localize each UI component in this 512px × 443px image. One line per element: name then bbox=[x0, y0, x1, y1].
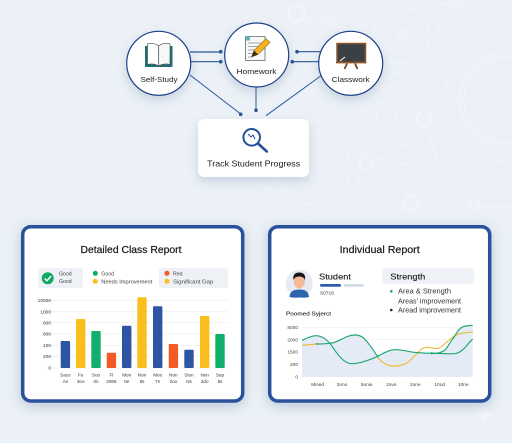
bar chart: 2do bbox=[201, 379, 209, 384]
bar chart: 2oo bbox=[170, 379, 178, 384]
legend: good badge: Good bbox=[59, 279, 72, 285]
line chart: 3ono bbox=[337, 382, 348, 388]
icon: paper and pencil bbox=[246, 36, 270, 60]
bar chart: Non bbox=[169, 373, 178, 378]
node: classwork bbox=[319, 31, 383, 95]
bar chart: Moo bbox=[153, 373, 163, 378]
line chart: 10od bbox=[434, 382, 445, 388]
decorative gears bbox=[263, 0, 512, 218]
bar chart: Non bbox=[138, 373, 147, 378]
strength box: Strength bbox=[390, 272, 426, 282]
line chart: 2ove bbox=[386, 382, 397, 388]
heading: track student progress: Track Student Progress bbox=[207, 159, 300, 169]
legend: red and significant gap: Significant Gap bbox=[173, 279, 213, 285]
line chart: 8000 bbox=[287, 325, 298, 331]
line chart: 200 bbox=[290, 362, 298, 368]
node: self-study bbox=[127, 31, 191, 95]
line chart: 0 bbox=[295, 375, 298, 381]
bar chart: 100 bbox=[43, 343, 51, 349]
bar chart: 800 bbox=[43, 320, 51, 326]
line chart: 1500 bbox=[287, 350, 298, 356]
bar chart: Fe bbox=[78, 373, 84, 378]
bar chart: 10000 bbox=[38, 298, 51, 304]
bar chart: Sion bbox=[184, 373, 194, 378]
strength list: Area & Strength bbox=[398, 289, 451, 296]
bar chart: Fl bbox=[109, 373, 113, 378]
panel: individual report bbox=[270, 227, 490, 401]
bar chart: 0 bbox=[48, 366, 51, 372]
icon: magnifier bbox=[243, 129, 267, 152]
bar chart: 8s bbox=[218, 379, 223, 384]
bar chart: 0n bbox=[93, 379, 99, 384]
strength box bbox=[382, 268, 474, 284]
legend: good and needs improvement bbox=[93, 271, 153, 285]
icon: chalkboard bbox=[336, 44, 366, 69]
legend: good badge bbox=[38, 268, 83, 288]
icon: open book bbox=[145, 43, 172, 67]
legend: good badge: Good bbox=[59, 272, 72, 278]
bar chart: 2066 bbox=[106, 379, 117, 384]
panel: track student progress bbox=[198, 119, 309, 177]
node: homework bbox=[225, 23, 289, 87]
line chart bbox=[287, 325, 473, 388]
legend: good and needs improvement: Needs Improvement bbox=[101, 279, 153, 285]
bar chart: 8s bbox=[140, 379, 145, 384]
label: self-study: Self-Study bbox=[140, 75, 178, 84]
bar chart: Mon bbox=[122, 373, 132, 378]
strength list: Areas' improvement bbox=[398, 298, 461, 305]
label: classwork: Classwork bbox=[332, 75, 370, 84]
chart subtitle: Poomed Syjerct bbox=[286, 311, 331, 317]
bar chart: Non bbox=[200, 373, 209, 378]
student id: S0716 bbox=[320, 291, 334, 297]
bar chart: 800 bbox=[43, 332, 51, 338]
label: homework: Homework bbox=[236, 67, 277, 76]
legend: red and significant gap: Red bbox=[173, 271, 183, 277]
student name: Student bbox=[319, 271, 352, 281]
bar chart: 3oo bbox=[77, 379, 85, 384]
legend: good and needs improvement: Good bbox=[101, 271, 114, 277]
bar chart: An bbox=[63, 379, 69, 384]
strength list bbox=[390, 289, 461, 315]
heading: individual report: Individual Report bbox=[340, 244, 420, 256]
line chart: 10ne bbox=[458, 382, 469, 388]
line chart: 5onie bbox=[361, 382, 373, 388]
bar chart: 1000 bbox=[40, 309, 51, 315]
icon: student avatar bbox=[286, 270, 313, 298]
heading: detailed class report: Detailed Class Report bbox=[80, 244, 182, 256]
line chart: Mised bbox=[311, 382, 324, 388]
connector lines bbox=[190, 50, 321, 116]
bar chart: Soo bbox=[92, 373, 101, 378]
bar chart: 200 bbox=[43, 354, 51, 360]
bar chart: 0e bbox=[124, 379, 130, 384]
bar chart: Ns bbox=[186, 379, 193, 384]
bar chart: Sace bbox=[60, 373, 71, 378]
line chart: 2one bbox=[410, 382, 421, 388]
bar chart: Sep bbox=[216, 373, 225, 378]
decorative sparkle bbox=[472, 403, 496, 427]
strength list: Aread improvement bbox=[398, 308, 461, 315]
panel: detailed class report bbox=[23, 227, 243, 401]
line chart: 2000 bbox=[287, 337, 298, 343]
bar chart: 7n bbox=[155, 379, 161, 384]
bar chart bbox=[38, 297, 228, 384]
legend: red and significant gap bbox=[159, 268, 228, 288]
progress bars bbox=[320, 284, 364, 287]
